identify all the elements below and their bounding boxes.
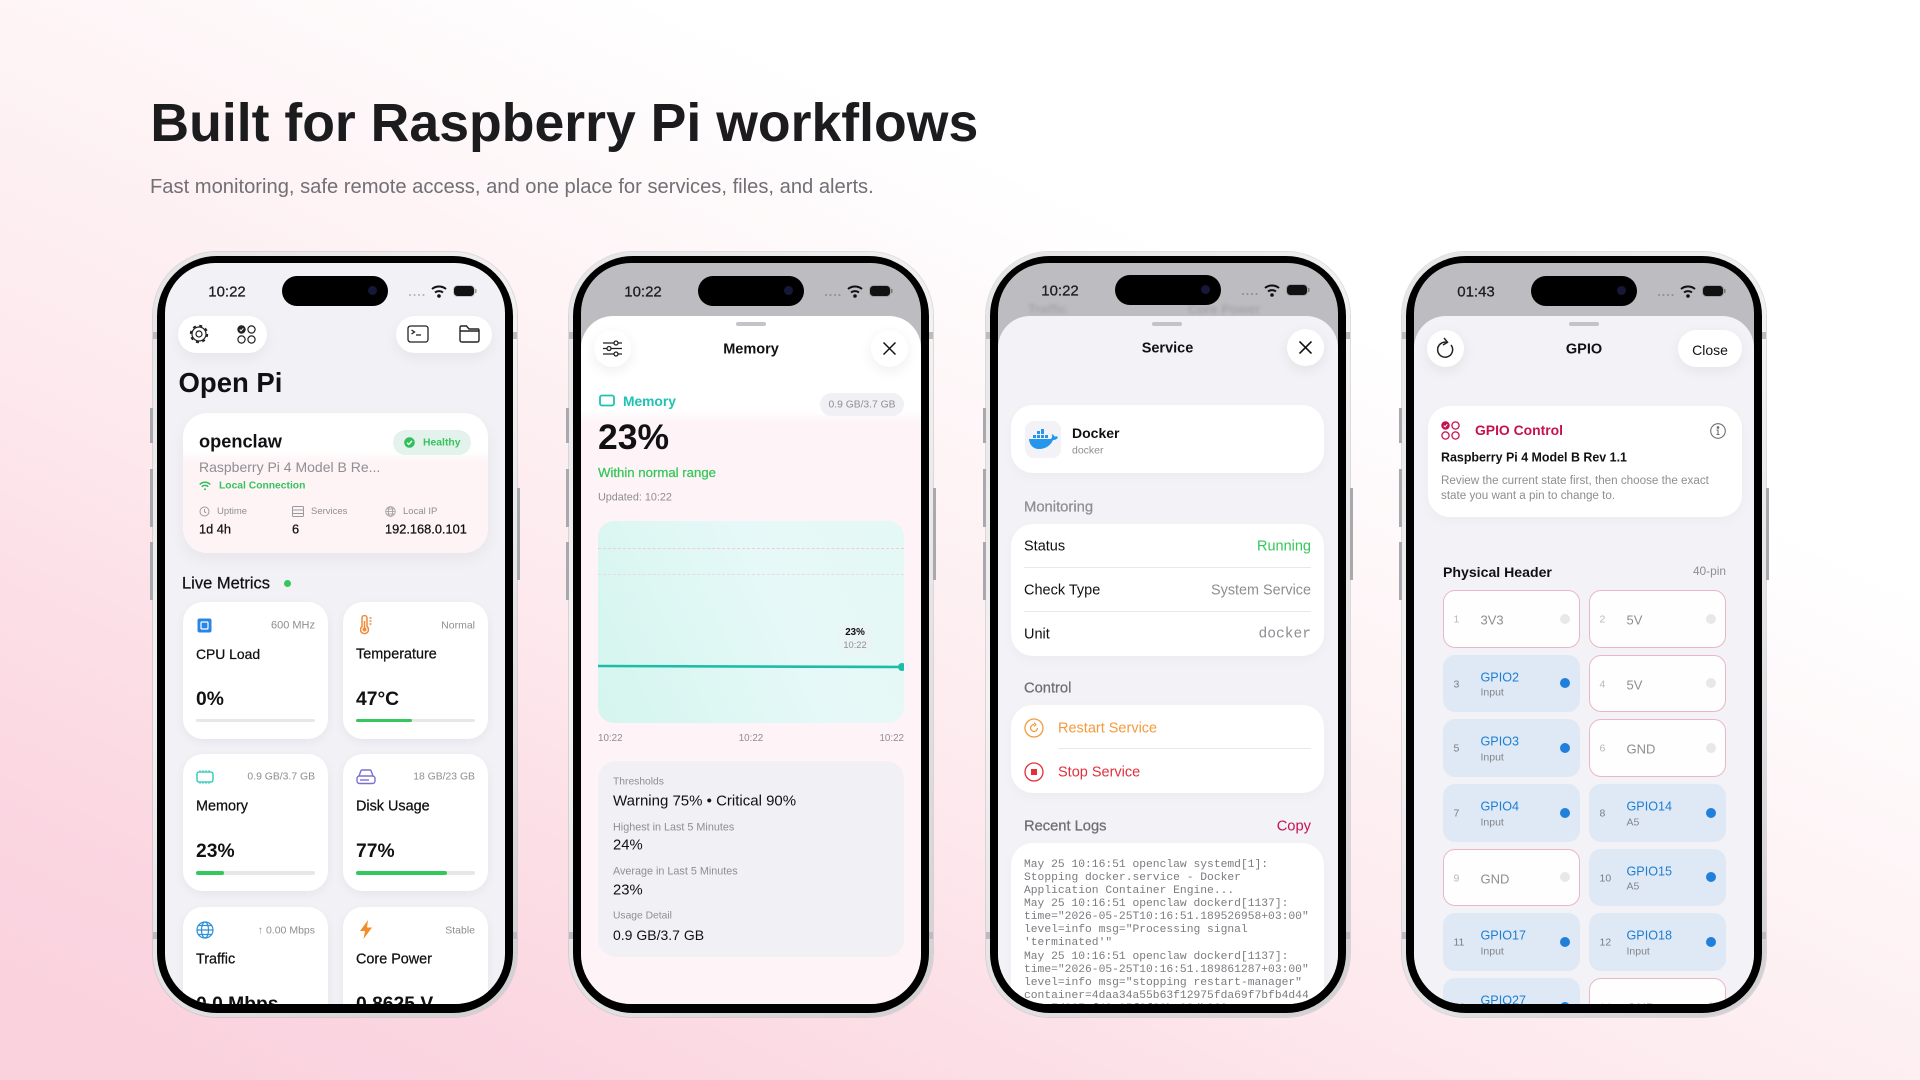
panel: device summary [183, 413, 488, 553]
pin 12: 12 [1600, 937, 1611, 949]
button: filter [594, 330, 631, 367]
area chart [598, 521, 904, 723]
status icons [1658, 285, 1726, 298]
pin 5: Input [1480, 751, 1504, 763]
screen: gpio sheet [1414, 263, 1754, 1004]
section label: control: Control [1024, 680, 1071, 696]
panel: memory statistics: Average in Last 5 Minutes [613, 865, 738, 877]
pin 11: Input [1480, 945, 1504, 957]
big percentage: 23% [598, 417, 669, 457]
panel: memory statistics: 0.9 GB/3.7 GB [613, 927, 704, 943]
panel: memory statistics: 23% [613, 882, 643, 898]
button: close [1287, 329, 1324, 366]
icon: gpio grid [1441, 421, 1460, 440]
button: refresh [1427, 330, 1464, 367]
icon: restart [1024, 718, 1044, 738]
card: docker service [1011, 405, 1324, 473]
status icons [825, 285, 892, 298]
stat: services: Services [311, 506, 347, 517]
card: gpio control intro [1428, 406, 1742, 517]
metric card: temperature: Temperature [356, 646, 437, 662]
sheet grabber [1569, 322, 1599, 326]
stat: services: 6 [292, 521, 299, 536]
blurred content behind sheet: Traffic [1028, 301, 1067, 316]
pin 6: 6 [1600, 743, 1605, 755]
pin 3 [1443, 655, 1580, 712]
pin 12: GPIO18 [1626, 929, 1672, 943]
card: docker service: docker [1072, 445, 1104, 457]
sheet background [998, 316, 1338, 1016]
panel: monitoring rows: docker [1258, 627, 1311, 643]
button: close [871, 330, 908, 367]
pin 10: A5 [1626, 881, 1639, 893]
icon: folder [459, 325, 480, 343]
sheet grabber [736, 322, 766, 326]
icon: docker whale [1025, 421, 1061, 458]
metric card: temperature: 47°C [356, 689, 399, 710]
line series [598, 663, 904, 671]
pin 9: 9 [1454, 872, 1459, 884]
button: close pill [1678, 330, 1742, 367]
memory heading [599, 394, 676, 409]
pin 3: GPIO2 [1480, 670, 1519, 684]
pin 8 [1589, 784, 1726, 842]
dynamic island [1531, 276, 1637, 306]
metric card: memory: Memory [196, 799, 248, 815]
tooltip: 23% [845, 627, 865, 638]
sheet title: Service [1142, 341, 1193, 357]
panel: control actions: Restart Service [1058, 721, 1157, 737]
metric card: traffic: Traffic [196, 952, 235, 968]
screen: service sheet [998, 263, 1338, 1004]
sheet background [1414, 316, 1754, 1016]
panel: monitoring rows: Running [1257, 539, 1311, 555]
pin 13 [1443, 978, 1580, 1036]
metric card: cpu load: 600 MHz [271, 619, 315, 631]
chart axis labels: 10:22 [879, 733, 904, 744]
sheet grabber [1152, 322, 1182, 326]
pin 12 [1589, 913, 1726, 971]
pin 5 [1443, 719, 1580, 777]
stat: uptime: Uptime [217, 506, 247, 517]
toolbar pill right [396, 316, 492, 353]
panel: memory statistics: Warning 75% • Critical 90% [613, 792, 796, 809]
pin count: 40-pin [1693, 564, 1726, 578]
metric card: disk usage: 18 GB/23 GB [413, 772, 475, 783]
metric card: cpu load [183, 602, 328, 738]
stat: uptime: 1d 4h [199, 521, 231, 536]
pin 8: 8 [1600, 808, 1605, 820]
pin 1 [1443, 590, 1580, 648]
section label: recent logs: Recent Logs [1024, 818, 1106, 834]
metric card: cpu load: 0% [196, 689, 224, 710]
pin 14 [1589, 978, 1726, 1036]
panel: control actions: Stop Service [1058, 765, 1140, 781]
panel: memory statistics: Highest in Last 5 Minutes [613, 821, 734, 833]
pin 10: 10 [1600, 872, 1611, 884]
dynamic island [282, 276, 388, 306]
sheet title: Memory [723, 342, 779, 358]
pin 9 [1443, 849, 1580, 906]
pin 11 [1443, 913, 1580, 971]
pin 7 [1443, 784, 1580, 842]
memory heading: Memory [623, 394, 676, 409]
pin 5: GPIO3 [1480, 735, 1519, 749]
phone: gpio control [1402, 252, 1766, 1017]
title: Built for Raspberry Pi workflows [150, 93, 978, 153]
pin 2 [1589, 590, 1726, 648]
panel: memory statistics: 24% [613, 837, 643, 853]
metric card: traffic: ↑ 0.00 Mbps [258, 925, 315, 937]
panel: monitoring rows: System Service [1211, 583, 1311, 599]
pin 11: GPIO17 [1480, 929, 1526, 943]
pin 10 [1589, 849, 1726, 906]
icon: info [1710, 423, 1726, 439]
range status: Within normal range [598, 465, 716, 480]
tooltip: 10:22 [843, 640, 867, 650]
status time: 01:43 [1457, 283, 1495, 300]
status time: 10:22 [1041, 282, 1079, 299]
gpio pin grid [1443, 590, 1726, 1004]
metric card: temperature: Normal [441, 620, 475, 632]
section heading: live metrics: Live Metrics [182, 575, 270, 593]
status icons [409, 285, 476, 298]
card: gpio control intro: Raspberry Pi 4 Model B Rev 1.1 [1441, 451, 1627, 465]
sheet background [581, 316, 921, 1016]
metric card: memory: 23% [196, 841, 235, 862]
chart axis labels: 10:22 [598, 733, 623, 744]
subtitle: Fast monitoring, safe remote access, and one place for services, files, and alerts. [150, 176, 874, 198]
stat: local ip [385, 506, 467, 536]
metric card: core power [343, 907, 488, 1044]
sheet title: GPIO [1566, 342, 1602, 358]
phone: service detail [986, 252, 1350, 1017]
metric card: traffic [183, 907, 328, 1044]
panel: monitoring rows: Unit [1024, 627, 1050, 643]
screen: Open Pi home [165, 263, 505, 1004]
panel: memory statistics: Usage Detail [613, 911, 672, 922]
healthy badge [393, 430, 471, 455]
icon: terminal [407, 325, 429, 343]
stat: local ip: Local IP [403, 506, 437, 517]
stat: local ip: 192.168.0.101 [385, 521, 467, 536]
pin 2: 2 [1600, 614, 1605, 626]
pin 8: GPIO14 [1626, 800, 1672, 814]
pin 7: Input [1480, 816, 1504, 828]
stat: uptime [199, 506, 247, 536]
pin 11: 11 [1454, 937, 1464, 949]
pin 4: 4 [1600, 678, 1605, 690]
status time: 10:22 [624, 283, 662, 300]
chart axis labels: 10:22 [739, 733, 763, 744]
card: gpio control intro: GPIO Control [1475, 422, 1563, 438]
pin 4: 5V [1626, 677, 1642, 692]
pin 8: A5 [1626, 816, 1639, 828]
pin 1: 1 [1454, 614, 1459, 626]
section heading: physical header: Physical Header [1443, 564, 1552, 580]
metric card: disk usage: Disk Usage [356, 799, 430, 815]
status time: 10:22 [208, 283, 246, 300]
panel: control actions [1011, 705, 1324, 793]
pin 2: 5V [1626, 612, 1642, 627]
pin 10: GPIO15 [1626, 864, 1672, 878]
panel: monitoring rows [1011, 524, 1324, 656]
icon: gpio grid [237, 325, 256, 344]
panel: monitoring rows: Check Type [1024, 583, 1100, 599]
pin 9: GND [1480, 871, 1509, 886]
status icons [1242, 284, 1310, 297]
blurred content behind sheet: Core Power [1188, 301, 1260, 316]
panel: monitoring rows: Status [1024, 539, 1065, 555]
pin 7: 7 [1454, 808, 1459, 820]
pin 3: Input [1480, 687, 1504, 699]
pin 6: GND [1626, 742, 1655, 757]
chart axis labels [598, 733, 904, 744]
tooltip [838, 623, 872, 655]
device name: openclaw [199, 431, 282, 451]
pin 5: 5 [1454, 743, 1459, 755]
pin 3: 3 [1454, 678, 1459, 690]
metric card: cpu load: CPU Load [196, 645, 260, 661]
metric card: memory [183, 754, 328, 891]
healthy badge: Healthy [423, 437, 461, 448]
phone: dashboard overview [153, 252, 517, 1017]
metric card: disk usage: 77% [356, 841, 395, 862]
metric card: temperature [343, 602, 488, 738]
card: gpio control intro: Review the current state first, then choose the exact [1441, 473, 1709, 486]
card: gpio control intro: state you want a pin to change to. [1441, 489, 1615, 502]
icon: settings gear [190, 324, 208, 344]
phone: memory detail [569, 252, 933, 1017]
dynamic island [698, 276, 804, 306]
dynamic island [1115, 275, 1221, 305]
copy action: Copy [1277, 818, 1311, 834]
metric card: core power: Stable [445, 925, 475, 937]
metric card: memory: 0.9 GB/3.7 GB [247, 772, 315, 783]
metric card: disk usage [343, 754, 488, 891]
screen: memory sheet [581, 263, 921, 1004]
usage pill [820, 393, 904, 416]
panel: memory statistics [598, 761, 904, 957]
toolbar pill left [178, 316, 267, 353]
panel: memory statistics: Thresholds [613, 777, 664, 788]
stat: services [292, 506, 347, 536]
metric card: core power: Core Power [356, 952, 432, 968]
section label: monitoring: Monitoring [1024, 499, 1093, 515]
pin 4 [1589, 655, 1726, 712]
app heading: Open Pi [178, 367, 282, 398]
card: docker service: Docker [1072, 425, 1119, 441]
pin 12: Input [1626, 945, 1650, 957]
pin 7: GPIO4 [1480, 800, 1519, 814]
pin 6 [1589, 719, 1726, 777]
pin 1: 3V3 [1480, 612, 1504, 627]
usage pill: 0.9 GB/3.7 GB [829, 399, 895, 410]
icon: stop [1024, 762, 1044, 782]
connection status: Local Connection [219, 481, 305, 492]
button: close pill: Close [1692, 342, 1728, 358]
updated time: Updated: 10:22 [598, 491, 672, 503]
device model: Raspberry Pi 4 Model B Re... [199, 459, 380, 475]
blurred content behind sheet [1028, 301, 1260, 316]
